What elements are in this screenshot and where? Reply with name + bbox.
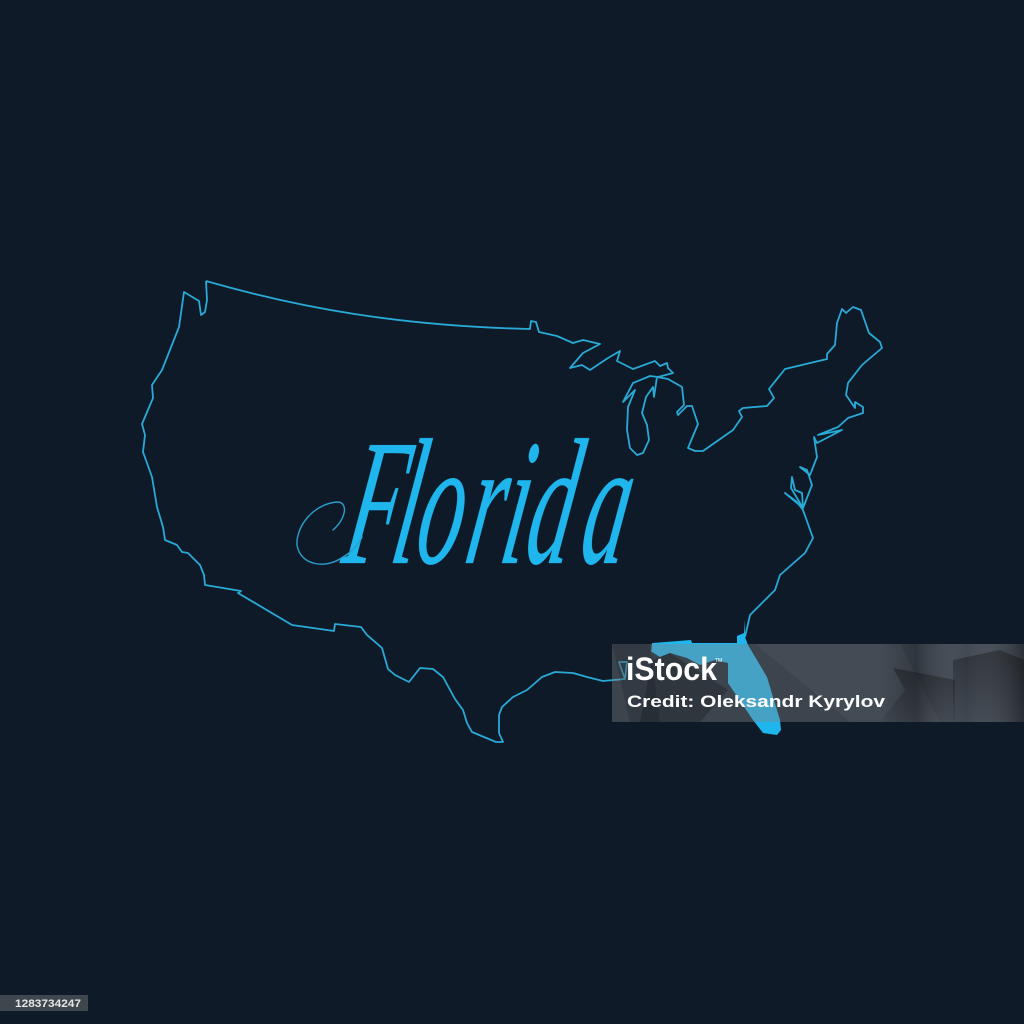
- right sheen: [880, 644, 1024, 722]
- flourish on initial letter: [297, 502, 362, 564]
- centre soft facet: [755, 644, 940, 722]
- right dark panel: [953, 650, 1024, 722]
- image id badge: [0, 995, 88, 1011]
- trademark mark: TM: [715, 658, 722, 664]
- iStock logo: iStock: [626, 651, 717, 687]
- map: Florida highlighted: [652, 620, 781, 735]
- badge plate: [0, 995, 88, 1011]
- map: USA outline: [142, 281, 882, 742]
- credit line: Credit: Oleksandr Kyrylov: [627, 692, 886, 711]
- title text: Florida: [332, 404, 650, 603]
- watermark banner: [612, 644, 1024, 722]
- banner plate: [612, 644, 1024, 722]
- mid dark shard: [880, 668, 955, 722]
- badge number: 1283734247: [15, 998, 81, 1010]
- title: Florida lettering: [297, 404, 650, 603]
- dark shard behind the logo: [640, 653, 728, 722]
- banner facets: [612, 644, 1024, 722]
- left dark facet: [612, 644, 660, 722]
